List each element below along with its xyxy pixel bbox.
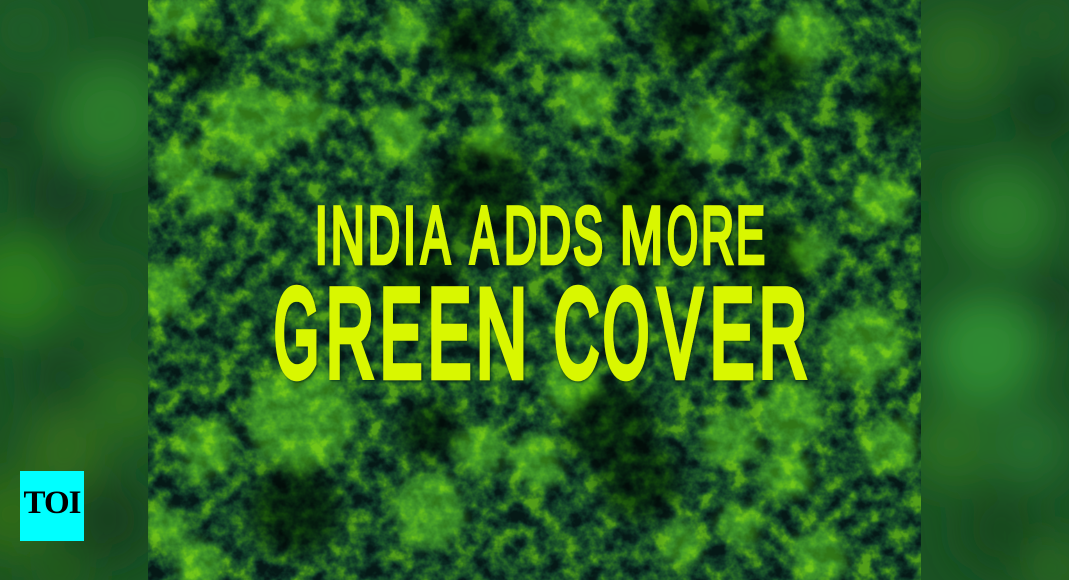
headline line 2: green cover: E [380,264,422,404]
headline line 1: India adds more: N [331,191,365,281]
headline line 1: India adds more: D [504,191,537,281]
headline line 2: green cover [274,264,807,404]
logo: TOI badge [20,471,84,541]
headline line 2: green cover: O [603,264,649,404]
headline line 1: India adds more: D [368,191,400,281]
tree crowns [139,0,918,580]
headline line 1: India adds more: E [736,191,765,281]
headline line 2: green cover: C [554,264,599,404]
headline line 2: green cover: E [710,264,754,404]
headline line 2: green cover: R [326,264,374,404]
canopy texture [148,0,921,580]
headline line 1: India adds more [315,191,765,281]
headline line 1: India adds more: A [470,191,498,281]
headline line 2: green cover: V [658,264,702,404]
panel: right blurred forest strip [910,0,1069,580]
headline line 1: India adds more: I [403,191,416,281]
headline line 2: green cover: G [274,264,319,404]
panel: central forest canopy photo [139,0,930,580]
headline [274,191,807,404]
headline line 1: India adds more: R [701,191,734,281]
headline line 2: green cover: N [476,264,527,404]
panel: left blurred forest strip [0,0,148,580]
headline line 1: India adds more: O [667,191,698,281]
headline line 1: India adds more: A [421,191,450,281]
headline line 1: India adds more: I [315,191,328,281]
headline line 1: India adds more: D [538,191,571,281]
headline line 1: India adds more: S [573,191,603,281]
dark canopy shadows [175,0,930,555]
headline line 2: green cover: R [759,264,807,404]
logo: TOI badge: TOI [24,485,80,521]
headline line 2: green cover: E [428,264,471,404]
headline line 1: India adds more: M [620,191,663,281]
